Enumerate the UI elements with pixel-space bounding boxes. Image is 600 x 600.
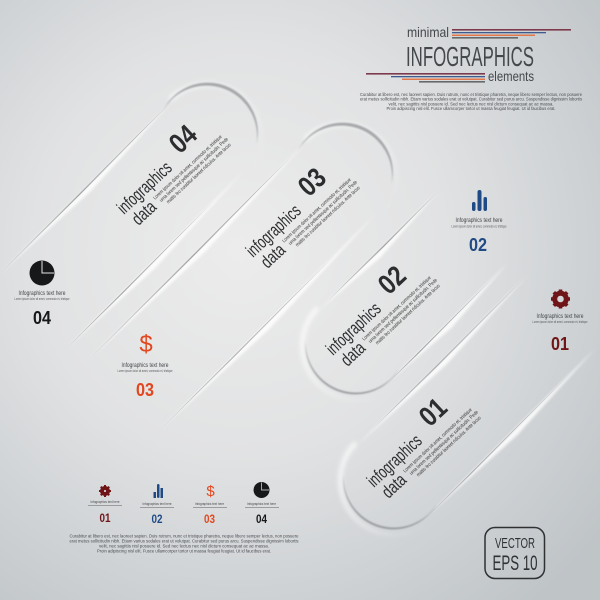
callout 03: Lorem ipsum dolor sit amet, commodo et, tristique (118, 369, 173, 373)
pill 01 text: urna lorem sed pellentesque ac sollicitudin. Pede (409, 409, 480, 477)
legend 02 (140, 484, 174, 526)
pill 02 text: 02 (372, 260, 412, 300)
pill 03 text: infographics (242, 201, 305, 261)
panel: pill 02 (277, 186, 515, 423)
pill 03 text: mattis leo curabitur laoreet ridiculus. Ante lacus (295, 185, 362, 248)
legend paragraph: erat metus sollicitudin nibh. Etiam varius sodales erat ut volutpat. Curabitur sed purus arcu. Suspendisse dignissim lobortis (70, 538, 298, 544)
title paragraph: erat metus sollicitudin nibh. Etiam varius sodales erat ut volutpat. Curabitur sed purus arcu. Suspendisse dignissim lobortis (360, 96, 582, 102)
legend paragraph: velit, nec sagittis nisl posuere id. Sed nec lectus nec nisl dictum consequat ac ac massa. (99, 544, 269, 548)
pill 04 text (103, 105, 234, 233)
panel: pill 04 (0, 59, 285, 353)
badge: vector eps 10: EPS 10 (492, 552, 538, 575)
pill 01 text: Lorem ipsum dolor sit amet, commodo et, tristique (402, 407, 474, 474)
pill 03 text: Lorem ipsum dolor sit amet, commodo et, tristique (281, 177, 353, 244)
pill 02 text: urna lorem sed pellentesque ac sollicitudin. Pede (368, 277, 439, 345)
legend 01: 01 (100, 511, 111, 525)
callout 04: Lorem ipsum dolor sit amet, commodo et, tristique (14, 297, 70, 301)
icon: dollar: $ (139, 331, 153, 358)
legend 01 (88, 483, 122, 525)
legend paragraph (70, 534, 299, 554)
callout 02: Lorem ipsum dolor sit amet, commodo et, tristique (452, 224, 507, 228)
pill 04 text: 04 (163, 118, 203, 159)
pill 02 text (312, 246, 443, 374)
callout 04: 04 (33, 308, 51, 328)
pill 04 text: data (128, 196, 161, 229)
legend 02: 02 (152, 512, 163, 526)
pill 04 text: urna lorem sed pellentesque ac sollicitudin. Pede (159, 136, 230, 204)
pill 04 text: Lorem ipsum dolor sit amet, commodo et, tristique (152, 134, 224, 201)
legend paragraph: Proin adipiscing nisl elit. Fusce ullamcorper tortor ut massa feugiat feugiat. Ut id faucibus erat. (97, 548, 271, 554)
legend 03: $ (206, 483, 215, 500)
pill 02 text: mattis leo curabitur laoreet ridiculus. Ante lacus (375, 283, 442, 346)
pill 02 text: Lorem ipsum dolor sit amet, commodo et, tristique (361, 275, 433, 342)
title paragraph (360, 92, 583, 111)
legend row (88, 482, 279, 526)
title block (366, 24, 571, 84)
callout 01: Infographics text here (536, 313, 584, 320)
legend 03 (193, 483, 227, 526)
pill 03 text: urna lorem sed pellentesque ac sollicitudin. Pede (288, 179, 359, 247)
pill 01 text (353, 378, 484, 506)
icon: gear (547, 286, 574, 312)
badge: vector eps 10 (485, 528, 544, 578)
pill 03 text (232, 148, 363, 276)
callout 04 (14, 260, 70, 328)
title block: minimal (407, 24, 449, 40)
pill 03 text: 03 (292, 162, 332, 202)
callout 03: 03 (136, 380, 154, 400)
panel: pill 01 (315, 269, 600, 558)
callout 03 (118, 331, 173, 400)
legend 04 (245, 482, 279, 526)
legend 03: 03 (204, 512, 215, 526)
icon: pie chart (30, 260, 54, 286)
callout 04: Infographics text here (18, 290, 66, 297)
icon: bar chart (472, 190, 487, 211)
badge: vector eps 10: VECTOR (495, 535, 535, 552)
pill 02 text: data (337, 337, 370, 370)
pill 04 text: infographics (113, 158, 176, 218)
title paragraph: Curabitur at libero est, nec laoreet sapien. Duis rutrum, nunc et tristique pharetra, neque libero semper lectus, non posuere (360, 92, 583, 97)
legend 03: Infographics text here (195, 502, 224, 506)
title paragraph: velit, nec sagittis nisl posuere id. Sed nec lectus nec nisl dictum consequat ac ac massa. (388, 102, 554, 106)
pill 01 text: mattis leo curabitur laoreet ridiculus. Ante lacus (416, 415, 483, 478)
legend paragraph: Curabitur at libero est, nec laoreet sapien. Duis rutrum, nunc et tristique pharetra, neque libero semper lectus, non posuere (70, 534, 299, 538)
panel: pill 03 (84, 99, 420, 436)
pill 01 text: data (378, 469, 411, 502)
callout 01 (532, 286, 588, 354)
legend 04: 04 (256, 512, 267, 526)
title paragraph: Proin adipiscing nisl elit. Fusce ullamcorper tortor ut massa feugiat feugiat. Ut id faucibus erat. (386, 106, 556, 111)
pill 02 text: infographics (322, 299, 385, 359)
callout 02: 02 (469, 235, 487, 255)
callout 02 (452, 190, 507, 255)
callout 01: 01 (551, 334, 569, 354)
pill 04 text: mattis leo curabitur laoreet ridiculus. Ante lacus (166, 142, 233, 205)
pill 01 text: 01 (413, 392, 453, 432)
title block: elements (488, 68, 534, 84)
pill 03 text: data (257, 239, 290, 272)
legend 04: Infographics text here (247, 502, 276, 506)
legend 01: Infographics text here (90, 500, 120, 504)
legend 02: Infographics text here (142, 502, 172, 506)
pill 01 text: infographics (363, 431, 426, 491)
callout 03: Infographics text here (122, 362, 169, 369)
callout 02: Infographics text here (456, 217, 503, 224)
